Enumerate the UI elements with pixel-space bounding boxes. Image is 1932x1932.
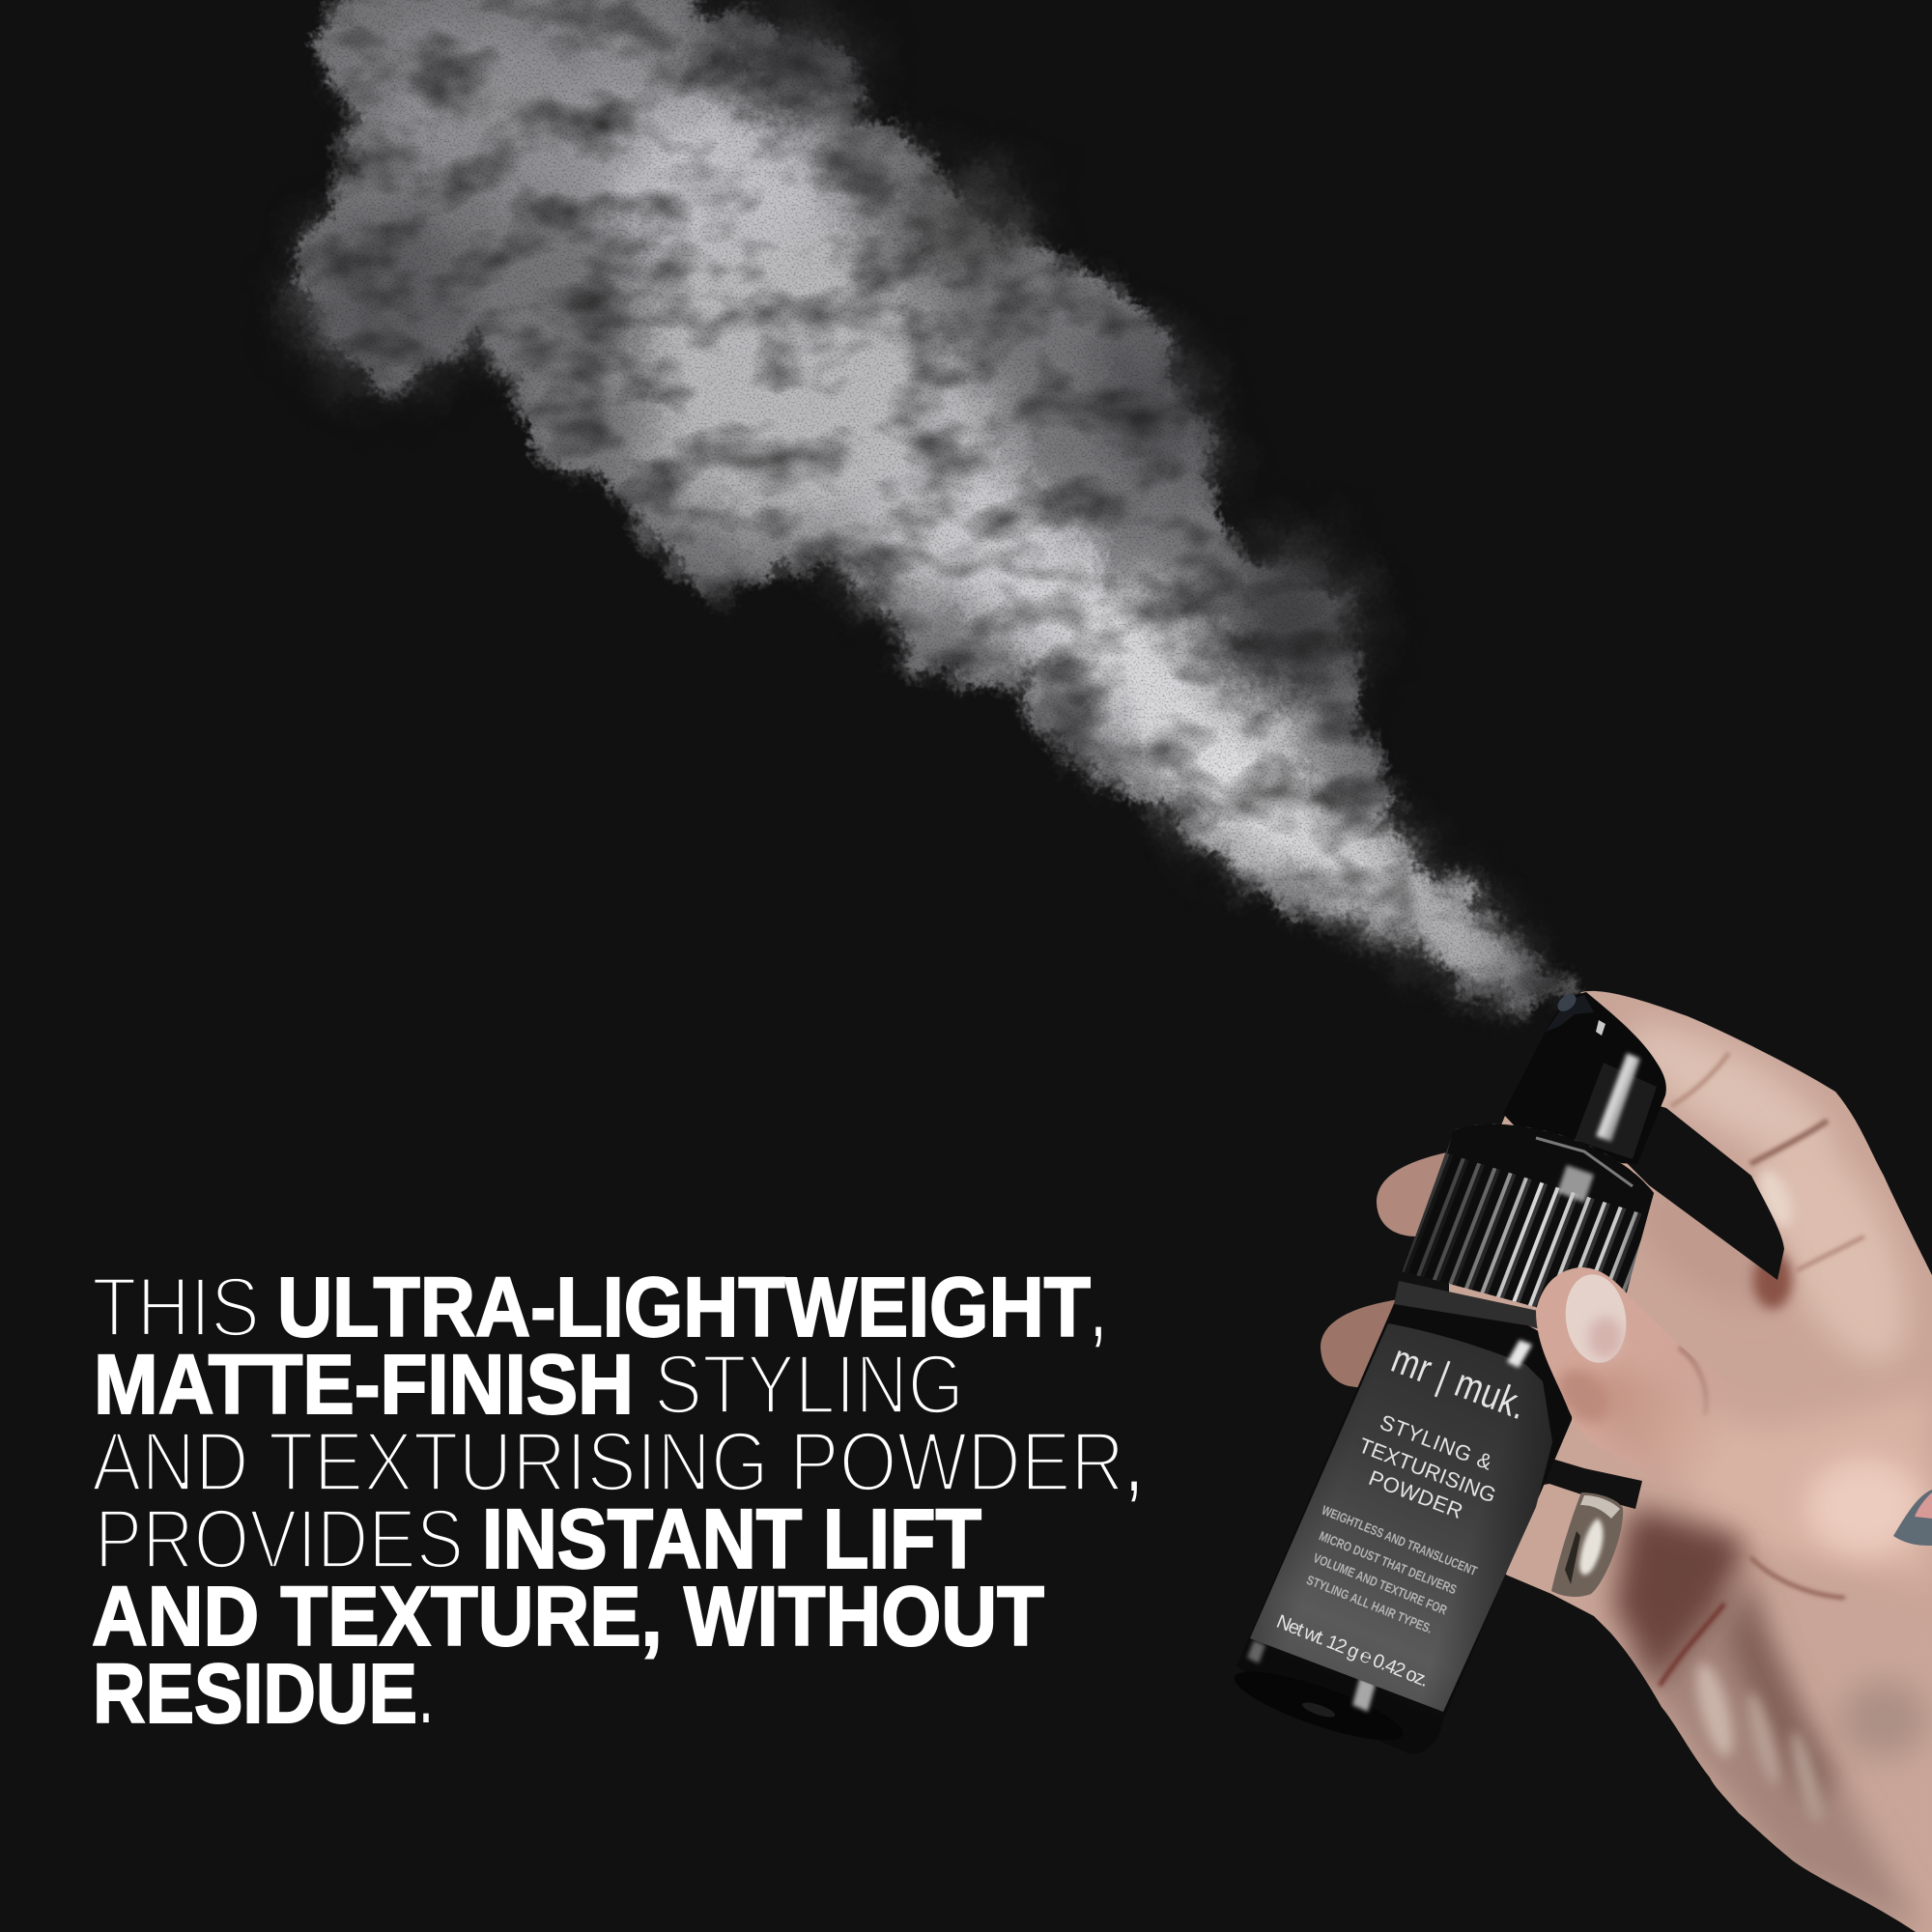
line 1: , bbox=[1091, 1261, 1106, 1354]
matte neck band bbox=[1394, 1281, 1633, 1348]
line 2 bbox=[94, 1338, 964, 1432]
headline text bbox=[92, 1261, 1142, 1741]
thumb over the bottle bbox=[1536, 1267, 1710, 1459]
hand silhouette with shading bbox=[1430, 966, 1932, 1932]
dark gap above the ring bbox=[1526, 1454, 1642, 1509]
grey label with product text: VOLUME AND TEXTURE FOR bbox=[1311, 1550, 1449, 1618]
grey label with product text: STYLING ALL HAIR TYPES. bbox=[1304, 1573, 1435, 1636]
line 5: AND TEXTURE, WITHOUT bbox=[92, 1570, 1044, 1663]
product bottle bbox=[1229, 991, 1671, 1754]
product name: STYLING & bbox=[1377, 1409, 1495, 1475]
line 4: INSTANT LIFT bbox=[482, 1492, 981, 1586]
grey label with product text: MICRO DUST THAT DELIVERS bbox=[1317, 1528, 1459, 1597]
line 6: RESIDUE bbox=[93, 1647, 417, 1741]
fingers behind the bottle bbox=[1321, 1140, 1526, 1401]
line 2: MATTE-FINISH bbox=[94, 1338, 634, 1432]
base of the bottle bbox=[1229, 1640, 1443, 1754]
thumb nail bbox=[1565, 1274, 1627, 1363]
grey label with product text bbox=[1250, 1323, 1552, 1712]
ribbed collar bbox=[1403, 1124, 1654, 1308]
line 1: ULTRA-LIGHTWEIGHT bbox=[277, 1261, 1091, 1354]
line 4 bbox=[95, 1492, 981, 1586]
powder spray cloud bbox=[292, 0, 1578, 1005]
net weight: Net wt. 12 g ℮ 0.42 oz. bbox=[1273, 1611, 1432, 1691]
hand holding the bottle bbox=[1321, 966, 1932, 1932]
grey label with product text: POWDER bbox=[1366, 1465, 1466, 1523]
line 3: , bbox=[1126, 1415, 1142, 1509]
line 3: AND TEXTURISING POWDER bbox=[92, 1415, 1124, 1509]
grey label with product text: TEXTURISING bbox=[1355, 1433, 1499, 1508]
line 6: . bbox=[418, 1647, 434, 1741]
body bbox=[1236, 1297, 1577, 1720]
tattoo on the hand bbox=[1893, 1490, 1932, 1546]
nozzle actuator bbox=[1503, 991, 1666, 1164]
brand name: mr | muk. bbox=[1386, 1335, 1534, 1429]
line 1: THIS bbox=[92, 1261, 260, 1354]
line 2: STYLING bbox=[654, 1338, 964, 1432]
dark gap between index and middle finger bbox=[1623, 1101, 1784, 1280]
line 4: PROVIDES bbox=[95, 1492, 464, 1586]
product description: WEIGHTLESS AND TRANSLUCENT bbox=[1320, 1503, 1480, 1578]
silver ring bbox=[1551, 1492, 1623, 1597]
